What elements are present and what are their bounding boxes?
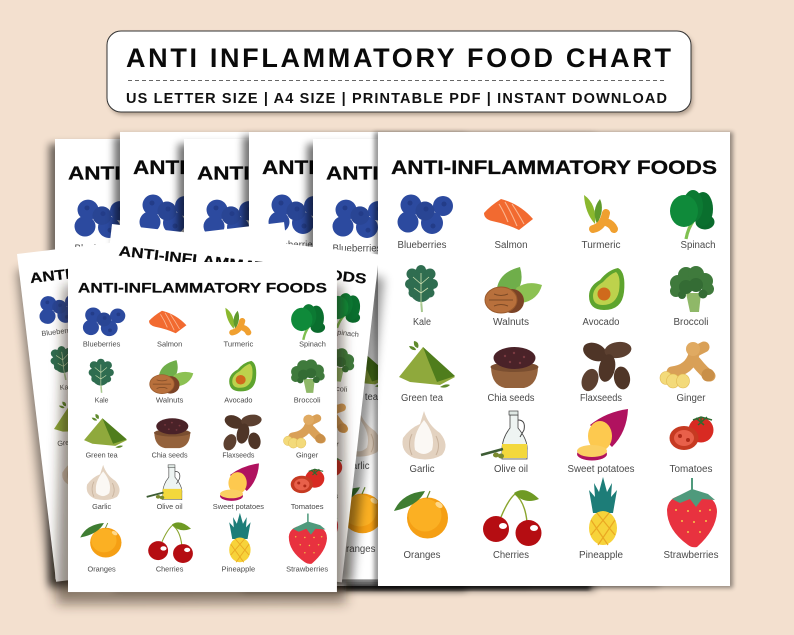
back sheet B: Blueberries — [140, 240, 188, 251]
back sheet D: ANTI-INFLAMMATORY FOODS — [262, 157, 588, 179]
back sheet E: Green tea — [336, 392, 379, 403]
tilted sheet left: ANTI-INFLAMMATORY FOODS — [29, 242, 279, 287]
tilted sheet left: Kale — [59, 382, 74, 392]
item: Spinach: Spinach — [680, 240, 716, 251]
tilted sheet right: Strawberries — [293, 550, 336, 563]
item: Avocado — [582, 268, 624, 328]
item: Cherries — [483, 490, 542, 561]
item: Chia seeds — [488, 347, 538, 404]
front item: Tomatoes — [291, 469, 324, 511]
item: Garlic: Garlic — [410, 464, 434, 475]
main right sheet — [345, 132, 733, 590]
front item: Turmeric: Turmeric — [223, 340, 254, 348]
item: Pineapple — [579, 477, 623, 561]
front sheet title: ANTI-INFLAMMATORY FOODS — [78, 281, 327, 296]
item: Strawberries — [664, 478, 718, 561]
item: Kale: Kale — [413, 317, 431, 328]
front item: Flaxseeds — [221, 412, 262, 460]
front item: Strawberries — [286, 514, 328, 574]
front item: Avocado: Avocado — [224, 395, 253, 404]
back sheet B — [114, 132, 472, 590]
back sheet E: ANTI-INFLAMMATORY FOODS — [326, 164, 652, 185]
tilted sheet right: ANTI-INFLAMMATORY FOODS — [118, 244, 368, 288]
front item: Cherries — [148, 522, 193, 574]
item: Broccoli: Broccoli — [674, 317, 708, 328]
front item: Olive oil: Olive oil — [157, 502, 183, 511]
back sheet D: Blueberries — [268, 240, 318, 251]
front item: Walnuts — [150, 360, 193, 404]
tilted sheet left: Green tea — [57, 435, 91, 448]
back sheet E — [307, 139, 665, 585]
front item: Salmon: Salmon — [157, 340, 182, 348]
front item: Broccoli: Broccoli — [294, 395, 321, 404]
tilted sheet right: Broccoli — [320, 382, 348, 394]
item: Oranges: Oranges — [404, 550, 440, 561]
front item: Kale — [89, 359, 114, 404]
front item: Green tea: Green tea — [86, 451, 118, 460]
back sheet A: ANTI-INFLAMMATORY FOODS — [68, 164, 394, 185]
back sheet C: Blueberries — [204, 244, 253, 254]
front item: Kale: Kale — [95, 395, 108, 404]
front item: Blueberries: Blueberries — [83, 340, 121, 348]
item: Spinach — [670, 190, 716, 251]
tilted sheet left: Blueberries — [41, 325, 79, 338]
back sheet E: Blueberries — [332, 244, 382, 254]
item: Cherries: Cherries — [493, 550, 529, 561]
back sheet C: ANTI-INFLAMMATORY FOODS — [197, 164, 523, 185]
front item: Garlic — [87, 465, 120, 511]
front item: Cherries: Cherries — [156, 565, 184, 574]
item: Sweet potatoes: Sweet potatoes — [568, 464, 634, 475]
back sheet A: Blueberries — [74, 244, 124, 254]
banner title: ANTI INFLAMMATORY FOOD CHART — [126, 43, 672, 73]
main sheet title: ANTI-INFLAMMATORY FOODS — [391, 157, 717, 179]
banner subtitle: US LETTER SIZE | A4 SIZE | PRINTABLE PDF | INSTANT DOWNLOAD — [126, 91, 667, 107]
front item: Ginger: Ginger — [296, 451, 319, 460]
item: Salmon — [484, 199, 533, 251]
front item: Spinach: Spinach — [299, 340, 326, 348]
front item: Blueberries — [83, 307, 125, 348]
front item: Chia seeds: Chia seeds — [152, 451, 188, 460]
item: Turmeric — [582, 195, 620, 251]
front item: Spinach — [291, 304, 326, 348]
back sheet E: Oranges — [338, 544, 376, 555]
item: Flaxseeds — [579, 339, 632, 404]
item: Ginger — [660, 342, 714, 404]
item: Tomatoes — [670, 417, 714, 475]
front item: Chia seeds — [152, 418, 191, 460]
item: Broccoli — [670, 266, 714, 328]
item: Oranges — [394, 491, 448, 561]
item: Ginger: Ginger — [676, 393, 706, 404]
back sheet C — [178, 139, 536, 585]
front item: Strawberries: Strawberries — [286, 565, 328, 574]
front sheet — [56, 262, 346, 604]
back sheet A — [49, 139, 407, 585]
front item: Oranges — [80, 523, 121, 574]
banner — [107, 31, 693, 115]
item: Blueberries — [398, 194, 453, 251]
tilted sheet right: Tomatoes — [305, 488, 339, 500]
front item: Olive oil — [147, 465, 183, 511]
item: Olive oil: Olive oil — [494, 464, 528, 475]
front item: Sweet potatoes: Sweet potatoes — [213, 502, 264, 511]
item: Tomatoes: Tomatoes — [670, 464, 712, 475]
item: Blueberries: Blueberries — [398, 240, 446, 251]
front item: Garlic: Garlic — [92, 502, 111, 511]
item: Pineapple: Pineapple — [579, 550, 623, 561]
item: Salmon: Salmon — [494, 240, 528, 251]
front item: Flaxseeds: Flaxseeds — [222, 451, 255, 460]
tilted sheet left — [17, 222, 323, 590]
item: Olive oil — [481, 411, 528, 475]
item: Sweet potatoes — [568, 409, 634, 475]
item: Chia seeds: Chia seeds — [488, 393, 534, 404]
tilted sheet right — [75, 224, 384, 584]
item: Green tea: Green tea — [401, 393, 443, 404]
front item: Sweet potatoes — [213, 463, 264, 511]
front item: Pineapple: Pineapple — [222, 565, 255, 574]
front item: Tomatoes: Tomatoes — [291, 502, 324, 511]
front item: Turmeric — [223, 308, 254, 348]
front item: Oranges: Oranges — [87, 565, 116, 574]
front item: Avocado — [224, 361, 256, 404]
tilted sheet left: Garlic — [69, 488, 90, 499]
back sheet D — [243, 132, 601, 590]
item: Walnuts: Walnuts — [493, 317, 529, 328]
front item: Ginger — [283, 415, 325, 460]
front item: Salmon — [149, 311, 186, 348]
item: Avocado: Avocado — [582, 317, 620, 328]
item: Strawberries: Strawberries — [664, 550, 718, 561]
tilted sheet right: Ginger — [316, 437, 340, 449]
back sheet B: ANTI-INFLAMMATORY FOODS — [133, 157, 459, 179]
item: Walnuts — [485, 267, 542, 328]
back sheet E: Garlic — [344, 461, 370, 472]
front item: Green tea — [84, 414, 127, 460]
front item: Walnuts: Walnuts — [156, 395, 184, 404]
front item: Broccoli — [291, 359, 325, 404]
item: Green tea — [399, 341, 455, 404]
item: Turmeric: Turmeric — [582, 240, 620, 251]
item: Kale — [405, 265, 438, 328]
item: Garlic — [402, 411, 446, 475]
front item: Pineapple — [222, 513, 255, 574]
item: Flaxseeds: Flaxseeds — [580, 393, 622, 404]
tilted sheet right: Spinach — [332, 327, 359, 339]
